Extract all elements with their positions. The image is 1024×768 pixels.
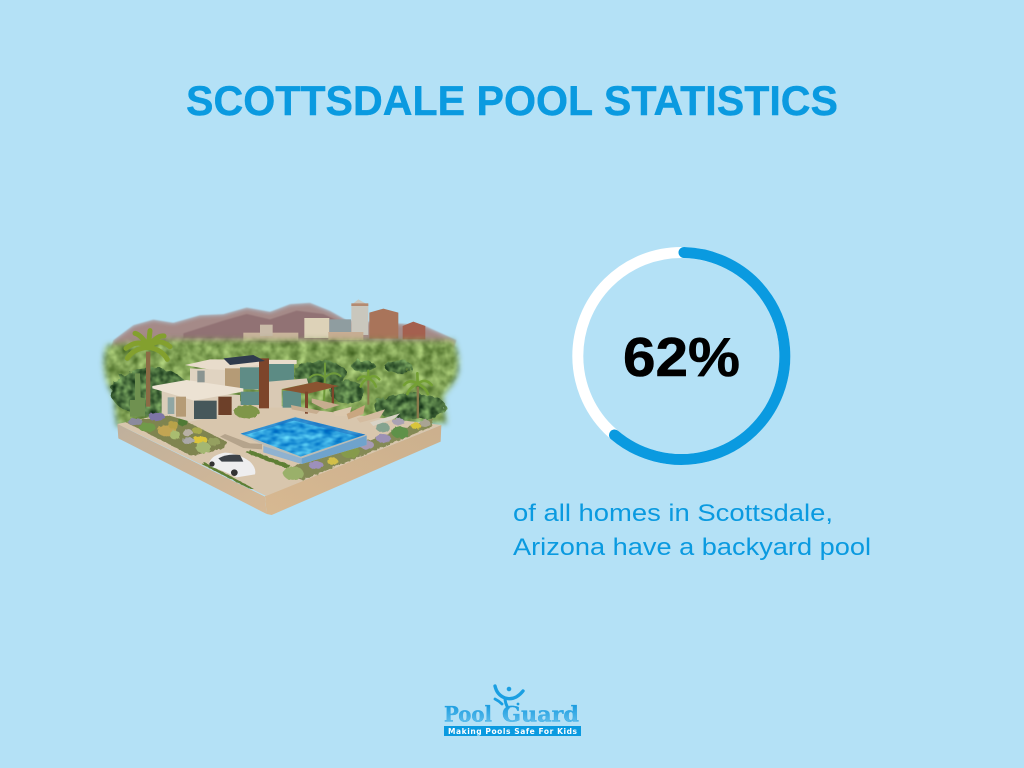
illustration: white car [209, 453, 255, 477]
caption: Arizona have a backyard pool [513, 534, 871, 561]
illustration: green landscape [104, 339, 459, 427]
logo wordmark: Guard: Guard [502, 702, 579, 726]
illustration: palm trees [126, 331, 432, 418]
donut track [578, 252, 785, 460]
donut chart: 62% [578, 252, 785, 460]
donut value arc [614, 252, 785, 459]
illustration: Scottsdale home with pool [104, 299, 459, 515]
icon: water splash [495, 686, 523, 708]
illustration: house [152, 355, 339, 422]
illustration: near trees [111, 360, 446, 420]
donut value label: 62% [623, 326, 740, 388]
logo tagline band [444, 726, 581, 736]
illustration: sun loungers [291, 398, 400, 426]
title: SCOTTSDALE POOL STATISTICS [186, 77, 838, 124]
illustration: mountains [110, 303, 457, 350]
illustration: base platform [117, 400, 441, 515]
logo: Pool Guard [444, 686, 581, 736]
illustration: pool [220, 417, 367, 464]
illustration: city skyline [243, 299, 425, 341]
caption [513, 500, 871, 561]
logo tagline: Making Pools Safe For Kids [448, 727, 578, 736]
illustration: garden beds [125, 412, 433, 489]
caption: of all homes in Scottsdale, [513, 500, 833, 527]
logo wordmark: Pool: Pool [444, 702, 492, 726]
